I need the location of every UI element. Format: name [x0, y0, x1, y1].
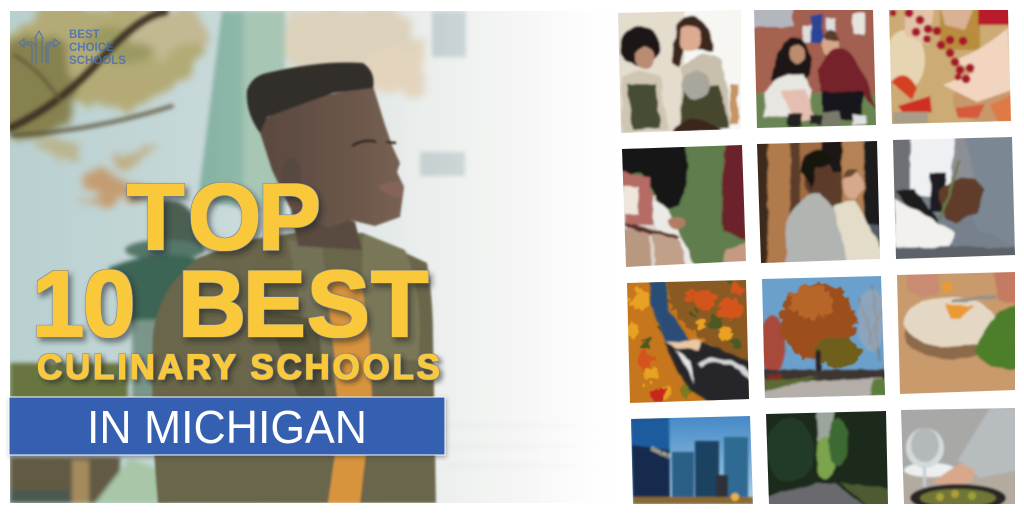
photo: knife on wooden board with greens [897, 272, 1015, 394]
photo: two young men in profile [757, 141, 880, 263]
orange shirt [322, 277, 372, 503]
heading line: TOP: TOP [127, 164, 321, 269]
mouth [378, 182, 403, 197]
student figure [152, 62, 436, 503]
photo: autumn tree along a street [758, 274, 888, 400]
bottom foreground [10, 457, 170, 503]
banner text: IN MICHIGAN [87, 401, 367, 453]
heading line: Culinary Schools: CULINARY SCHOOLS [37, 348, 440, 387]
banner: In Michigan [9, 397, 445, 455]
title: Top 10 Best Culinary Schools [32, 164, 440, 387]
photo: hand writing in notebook [893, 137, 1015, 259]
photo: forest road [766, 411, 888, 504]
face [257, 86, 404, 228]
logo: Best Choice Schools [19, 29, 126, 67]
photo: student taking notes on grass [622, 145, 746, 267]
photo: city skyline at dusk: SMURT [649, 446, 671, 461]
icon: road arrows [19, 31, 60, 63]
photo: hand with red currants [889, 10, 1011, 124]
logo wordmark: CHOICE [69, 42, 114, 54]
tree branches [10, 12, 172, 135]
photo: city skyline at dusk [631, 416, 753, 504]
photo: table with wine glass and food [901, 408, 1015, 504]
banner bar [9, 397, 445, 455]
photo: students on a campus lawn [754, 10, 876, 128]
eye and brow [352, 141, 376, 146]
heading line: 10 BEST: 10 BEST [32, 251, 428, 356]
logo wordmark: SCHOOLS [69, 55, 126, 67]
ear [298, 170, 300, 183]
pale building detail [418, 11, 468, 178]
hero photo: student in front of campus building [10, 11, 558, 503]
photo: autumn forest waterfall [627, 280, 749, 403]
verdigris column [198, 11, 285, 215]
neck [290, 207, 362, 250]
bronze urn [108, 200, 205, 400]
white fade toward the right [536, 11, 622, 503]
background foliage [0, 5, 430, 205]
hair [247, 62, 374, 133]
jacket [152, 232, 436, 503]
hedge [10, 363, 128, 399]
logo wordmark: BEST [69, 29, 100, 41]
photo: two women in aprons [618, 10, 741, 133]
jacket collar [362, 233, 420, 360]
